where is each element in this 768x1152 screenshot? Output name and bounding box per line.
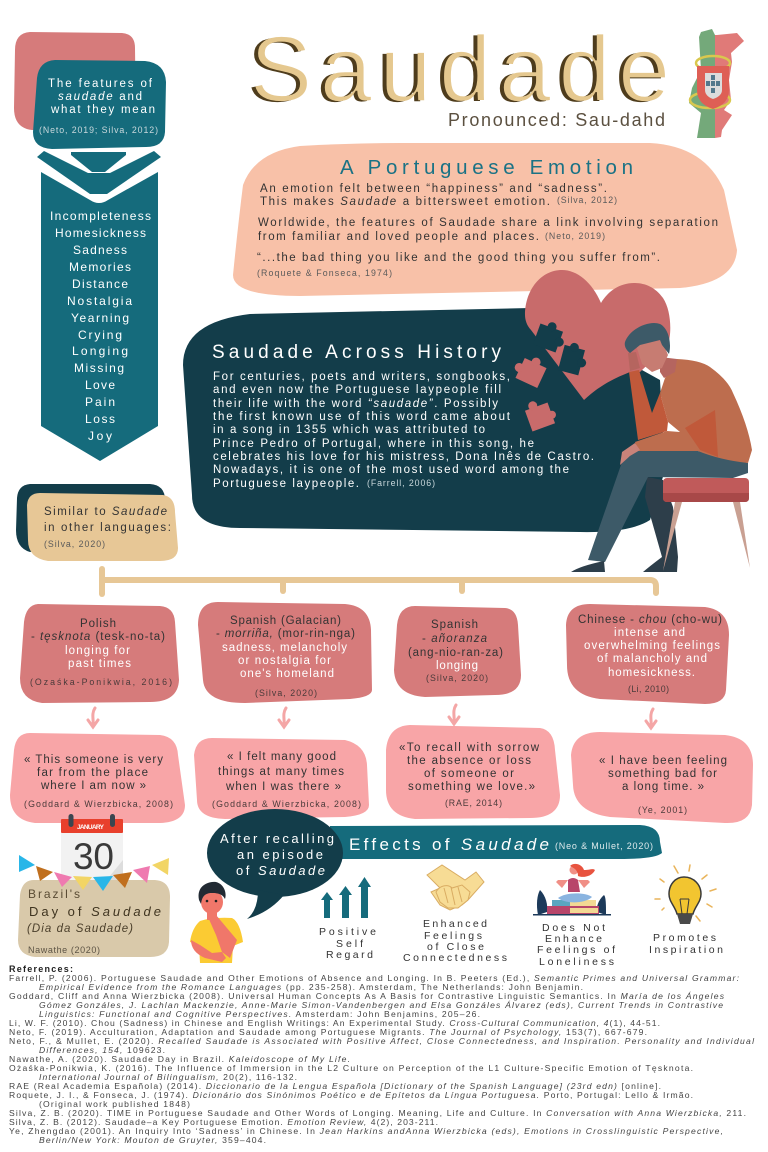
references: References: [9, 964, 73, 974]
teal banner with feature list: Longing [72, 344, 128, 358]
icon: calendar January 30: JANUARY [77, 824, 105, 831]
icon: light bulb [655, 865, 716, 924]
teal banner with feature list: Missing [74, 361, 124, 375]
quote: Galacian: (Goddard & Wierzbicka, 2008) [212, 799, 361, 809]
icon: clasped hands [427, 865, 484, 910]
quote: Chinese: something bad for [608, 768, 717, 780]
quote: Chinese: « I have been feeling [599, 755, 727, 767]
panel: Spanish (Galacian) [198, 602, 372, 703]
quote: Polish: far from the place [37, 767, 148, 779]
teal banner with feature list: Homesickness [55, 226, 146, 240]
panel body text [257, 183, 718, 278]
title: Saudade [250, 17, 670, 121]
illustration: sad man on stool [571, 323, 752, 572]
arrow: Polish to quote [88, 708, 98, 727]
icon: rising arrows [321, 877, 371, 918]
history heading: Saudade Across History [212, 342, 502, 363]
references: Silva, Z. B. (2012). Saudade–a Key Portuguese Emotion. Emotion Review, 4(2), 203-211. [9, 1117, 438, 1127]
callout: after recalling speech bubble [207, 809, 343, 919]
panel: Polish: longing for [65, 645, 130, 657]
icon: thinking person [190, 882, 243, 963]
panel: Brazil's day of saudade [18, 814, 170, 957]
bunting flags [19, 855, 169, 891]
quote: Chinese: (Ye, 2001) [638, 805, 687, 815]
effect: closeness [403, 865, 507, 964]
references: Ożaśka-Ponikwia, K. (2016). The Influence of Immersion in the L2 Culture on Perception of the L1 Culture-Specific Emotion of Tęsknota. [9, 1063, 693, 1073]
panel: Spanish (Galacian): or nostalgia for [238, 655, 331, 667]
panel: features of saudade [14, 32, 166, 461]
panel: Spanish (Galacian): Spanish (Galacian) [230, 615, 341, 627]
effect: loneliness: Feelings of [537, 944, 615, 956]
panel: similar to saudade in other languages: in other languages: [44, 522, 171, 534]
features heading box: The features of [48, 78, 153, 90]
quote: Spanish: something we love.» [408, 781, 535, 793]
panel: similar to saudade in other languages [16, 484, 178, 561]
references: (Original work published 1848) [39, 1099, 190, 1109]
paper note [18, 880, 170, 957]
paper note: (Dia da Saudade) [27, 923, 133, 935]
references: Goddard, Cliff and Anna Wierzbicka (2008). Universal Human Concepts As A Basis for Contrastive Linguistic Semantics. In María de los Ángeles [9, 991, 725, 1001]
quote: Spanish: of someone or [424, 768, 514, 780]
panel: effects banner: Effects of Saudade [349, 835, 549, 854]
arrow: Galacian to quote [279, 708, 289, 727]
panel body text: (Silva, 2012) [557, 195, 617, 205]
features heading box: what they mean [50, 104, 155, 116]
history body text: in a song in 1355 which was attributed to [213, 424, 485, 436]
panel: similar to saudade in other languages: Similar to Saudade [44, 506, 167, 518]
teal banner with feature list: Nostalgia [67, 294, 132, 308]
quote: Polish: (Goddard & Wierzbicka, 2008) [24, 799, 173, 809]
references: Differences, 154, 109623. [39, 1045, 165, 1055]
title [251, 34, 665, 102]
connector bracket [102, 569, 656, 594]
references: Nawathe, A. (2020). Saudade Day in Brazil. Kaleidoscope of My Life. [9, 1054, 350, 1064]
puzzle pieces dark [533, 318, 591, 377]
history body text: Portuguese laypeople. [213, 478, 359, 490]
panel body text: from familiar and loved people and places. [258, 231, 539, 243]
references: Li, W. F. (2010). Chou (Sadness) in Chinese and English Writings: An Experimental Study. Cross-Cultural Communication, 4(1), 44-51. [9, 1018, 660, 1028]
callout: after recalling speech bubble: an episode [237, 847, 323, 862]
teal banner with feature list: Yearning [71, 311, 129, 325]
panel: Chinese: (Li, 2010) [628, 684, 669, 694]
references [9, 964, 755, 1145]
illustration: broken heart [510, 270, 670, 431]
effect: closeness: Enhanced [423, 918, 487, 930]
effect: positive self regard: Self [336, 938, 363, 950]
panel: Spanish: (ang-nio-ran-za) [408, 647, 503, 659]
teal banner with feature list: Memories [69, 260, 131, 274]
panel: Chinese: intense and [614, 627, 685, 639]
effect: closeness: of Close [427, 941, 484, 953]
history body text: Prince Pedro of Portugal, where in this song, he [213, 438, 534, 450]
panel: Spanish [394, 606, 521, 697]
paper note: Day of Saudade [29, 904, 161, 919]
teal banner with feature list: Love [85, 378, 115, 392]
teal banner with feature list: Loss [85, 412, 115, 426]
panel heading: A Portuguese Emotion [340, 156, 633, 179]
quote: Spanish: the absence or loss [407, 755, 531, 767]
panel: Polish: Polish [80, 618, 116, 630]
panel: effects banner [330, 825, 662, 859]
references: Empirical Evidence from the Romance Languages (pp. 235-258). Amsterdam, The Netherlands: John Benjamin. [39, 982, 583, 992]
references: Ye, Zhengdao (2001). An Inquiry Into ‘Sadness’ in Chinese. In Jean Harkins andAnna Wierzbicka (eds), Emotions in Crosslinguistic Perspective, [9, 1126, 723, 1136]
effect: inspiration: Promotes [653, 932, 716, 944]
panel: Chinese: homesickness. [608, 667, 695, 679]
effect: closeness: Connectedness [403, 952, 507, 964]
quote: Polish [10, 733, 185, 823]
teal banner with feature list: Incompleteness [50, 209, 151, 223]
effect: loneliness [533, 864, 615, 968]
panel: Polish: past times [68, 658, 131, 670]
panel: Spanish: longing [436, 660, 478, 672]
icon: calendar January 30 [61, 814, 123, 888]
teal banner with feature list: Distance [72, 277, 128, 291]
panel: Chinese: overwhelming feelings [584, 640, 720, 652]
history body text: and even now the Portuguese laypeople fill [213, 384, 501, 396]
panel: Spanish (Galacian): one's homeland [240, 668, 334, 680]
quote: Galacian: « I felt many good [227, 751, 336, 763]
callout: after recalling speech bubble: of Saudade [236, 863, 325, 878]
effect: loneliness: Does Not [542, 922, 605, 934]
title: Saudade [246, 18, 666, 122]
teal banner with feature list: Pain [85, 395, 115, 409]
panel: Chinese: Chinese - chou (cho-wu) [578, 614, 722, 626]
panel body text: (Neto, 2019) [545, 231, 605, 241]
references: Neto, F., & Mullet, E. (2020). Recalled Saudade is Associated with Positive Affect, Close Connectedness, and Inspiration. Personality and Individual [9, 1036, 755, 1046]
quote: Spanish: (RAE, 2014) [445, 798, 502, 808]
quote: Chinese [571, 732, 753, 823]
effect: closeness: Feelings [424, 930, 482, 942]
references: Roquete, J. I., & Fonseca, J. (1974). Dicionário dos Sinónimos Poético e de Epítetos da Língua Portuguesa. Porto, Portugal: Lello & Irmão. [9, 1090, 693, 1100]
references: RAE (Real Academia Española) (2014). Diccionario de la Lengua Española [Dictionary of the Spanish Language] (23rd edn) [online]. [9, 1081, 661, 1091]
effect: positive self regard [319, 877, 376, 961]
panel body text: Worldwide, the features of Saudade share a link involving separation [258, 217, 718, 229]
panel: Saudade Across History [183, 270, 670, 532]
callout: after recalling speech bubble: After recalling [220, 831, 334, 846]
arrow: Chinese to quote [646, 709, 656, 728]
effect: positive self regard: Regard [326, 949, 373, 961]
effect: loneliness: Loneliness [539, 956, 614, 968]
teal banner with feature list: Joy [88, 429, 112, 443]
panel: Spanish: - añoranza [422, 633, 487, 645]
panel: A Portuguese Emotion [233, 143, 737, 296]
quote: Galacian: things at many times [218, 766, 344, 778]
panel: Spanish (Galacian): - morriña, (mor-rin-nga) [216, 628, 355, 640]
panel: similar to saudade in other languages: (Silva, 2020) [44, 539, 105, 549]
panel body text: “...the bad thing you like and the good thing you suffer from”. [257, 252, 660, 264]
panel: Spanish: Spanish [431, 619, 478, 631]
panel body text: (Roquete & Fonseca, 1974) [257, 268, 392, 278]
quote: Spanish: «To recall with sorrow [399, 742, 540, 754]
references: Neto, F. (2019). Acculturation, Adaptation and Saudade among Portuguese Migrants. The Journal of Psychology, 153(7), 667-679. [9, 1027, 647, 1037]
history body text [213, 371, 594, 490]
icon: calendar January 30: 30 [73, 836, 114, 877]
effect: loneliness: Enhance [545, 933, 602, 945]
panel: Chinese: of malancholy and [597, 653, 707, 665]
panel: Spanish (Galacian): (Silva, 2020) [255, 688, 317, 698]
panel body text: This makes Saudade a bittersweet emotion. [260, 196, 550, 208]
icon: woman meditating on books [533, 864, 611, 916]
features heading box: (Neto, 2019; Silva, 2012) [39, 125, 158, 135]
panel: Polish: - tęsknota (tesk-no-ta) [31, 631, 165, 643]
history body text: (Farrell, 2006) [367, 478, 435, 488]
references: Linguistics: Functional and Cognitive Perspectives. Amsterdam: John Benjamins, 205–26. [39, 1009, 480, 1019]
features heading box [33, 60, 166, 149]
panel: effects banner: (Neo & Mullet, 2020) [555, 841, 653, 851]
panel body text: An emotion felt between “happiness” and “sadness”. [260, 183, 607, 195]
effect: positive self regard: Positive [319, 926, 376, 938]
teal banner with feature list [41, 172, 158, 461]
quote: Galacian: when I was there » [225, 781, 341, 793]
references: Farrell, P. (2006). Portuguese Saudade and Other Emotions of Absence and Longing. In B. Peeters (Ed.), Semantic Primes and Universal Grammar: [9, 973, 740, 983]
quote: Chinese: a long time. » [622, 781, 704, 793]
features heading box: saudade and [58, 91, 142, 103]
paper note: Brazil's [28, 887, 80, 901]
references: Silva, Z. B. (2020). TIME in Portuguese Saudade and Other Words of Longing. Meaning, Life and Culture. In Conversation with Anna Wierzbicka, 211. [9, 1108, 746, 1118]
quote: Spanish [386, 725, 560, 819]
pink backing square [14, 32, 136, 130]
history body text: the first known use of this word came about [213, 411, 511, 423]
panel: Spanish (Galacian): sadness, melancholy [222, 642, 347, 654]
effect: inspiration [649, 865, 723, 956]
panel: Polish [20, 604, 179, 703]
references: Berlin/New York: Mouton de Gruyter, 359–404. [39, 1135, 266, 1145]
references: Gómez Gonzáles, J. Lachlan Mackenzie, Anne-Marie Simon-Vandenbergen and Elsa Gonzáles Álvarez (eds), Current Trends in Contrastive [39, 1000, 723, 1010]
quote: Galacian [194, 738, 369, 819]
chevron icon [37, 151, 161, 194]
panel: Spanish: (Silva, 2020) [426, 673, 488, 683]
icon: Portugal map in flag colours [689, 29, 744, 138]
panel: Polish: (Ozaśka-Ponikwia, 2016) [30, 677, 172, 687]
history body text: Nowadays, it is one of the most used word among the [213, 464, 569, 476]
teal banner with feature list: Crying [78, 328, 122, 342]
arrow: Spanish to quote [449, 705, 459, 724]
history body text: celebrates his love for his mistress, Dona Inês de Castro. [213, 451, 594, 463]
references: International Journal of Bilingualism, 20(2), 116-132. [39, 1072, 297, 1082]
history body text: For centuries, poets and writers, songbooks, [213, 371, 510, 383]
quote: Polish: where I am now » [40, 780, 146, 792]
subtitle: pronunciation: Pronounced: Sau-dahd [448, 110, 665, 130]
panel: Chinese [566, 604, 729, 704]
paper note: Nawathe (2020) [28, 945, 100, 955]
quote: Polish: « This someone is very [24, 754, 163, 766]
effect: inspiration: Inspiration [649, 944, 723, 956]
teal banner with feature list: Sadness [73, 243, 127, 257]
history body text: their life with the word “saudade”. Possibly [213, 398, 498, 410]
puzzle pieces pink [510, 351, 559, 431]
